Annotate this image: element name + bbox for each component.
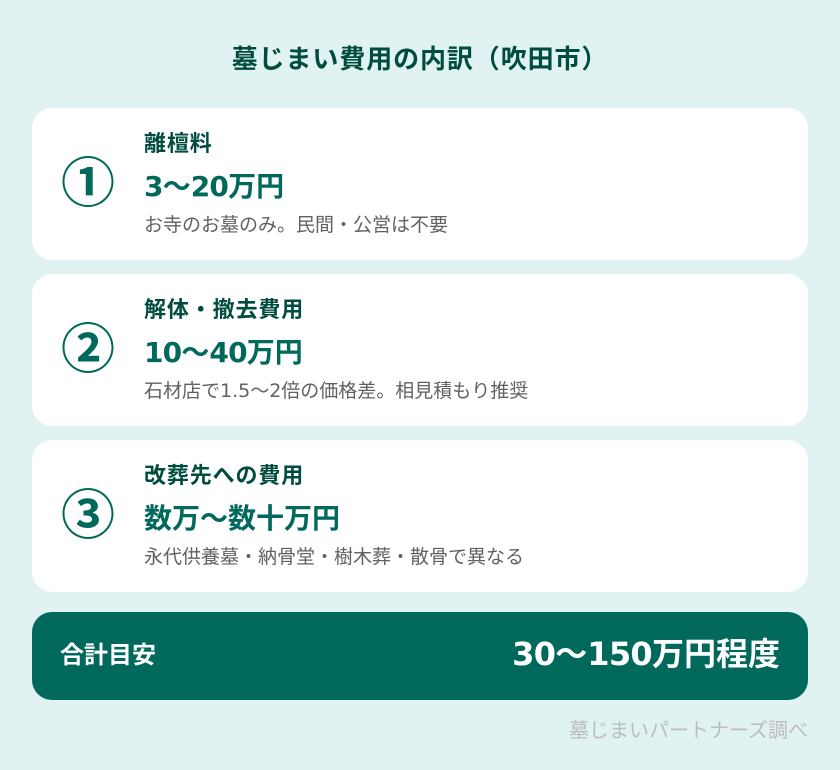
source: 墓じまいパートナーズ調べ bbox=[569, 718, 808, 742]
note 1: お寺のお墓のみ。民間・公営は不要 bbox=[144, 214, 448, 236]
panel: item 3 bbox=[32, 440, 808, 592]
label 1: 離檀料 bbox=[144, 132, 213, 157]
label 2: 解体・撤去費用 bbox=[144, 298, 304, 323]
cost 3: 数万〜数十万円 bbox=[144, 502, 340, 535]
note 2: 石材店で1.5〜2倍の価格差。相見積もり推奨 bbox=[144, 380, 528, 402]
title: 墓じまい費用の内訳（吹田市） bbox=[232, 45, 608, 75]
number 3: ③ bbox=[61, 471, 115, 550]
total label: 合計目安 bbox=[60, 641, 156, 669]
label 3: 改葬先への費用 bbox=[144, 464, 304, 489]
panel: total bbox=[32, 612, 808, 700]
panel: item 1 bbox=[32, 108, 808, 260]
total value: 30〜150万円程度 bbox=[512, 635, 780, 673]
panel: item 2 bbox=[32, 274, 808, 426]
cost 1: 3〜20万円 bbox=[144, 170, 284, 203]
number 2: ② bbox=[61, 305, 115, 384]
number 1: ① bbox=[61, 139, 115, 218]
note 3: 永代供養墓・納骨堂・樹木葬・散骨で異なる bbox=[144, 546, 524, 568]
cost 2: 10〜40万円 bbox=[144, 336, 303, 369]
